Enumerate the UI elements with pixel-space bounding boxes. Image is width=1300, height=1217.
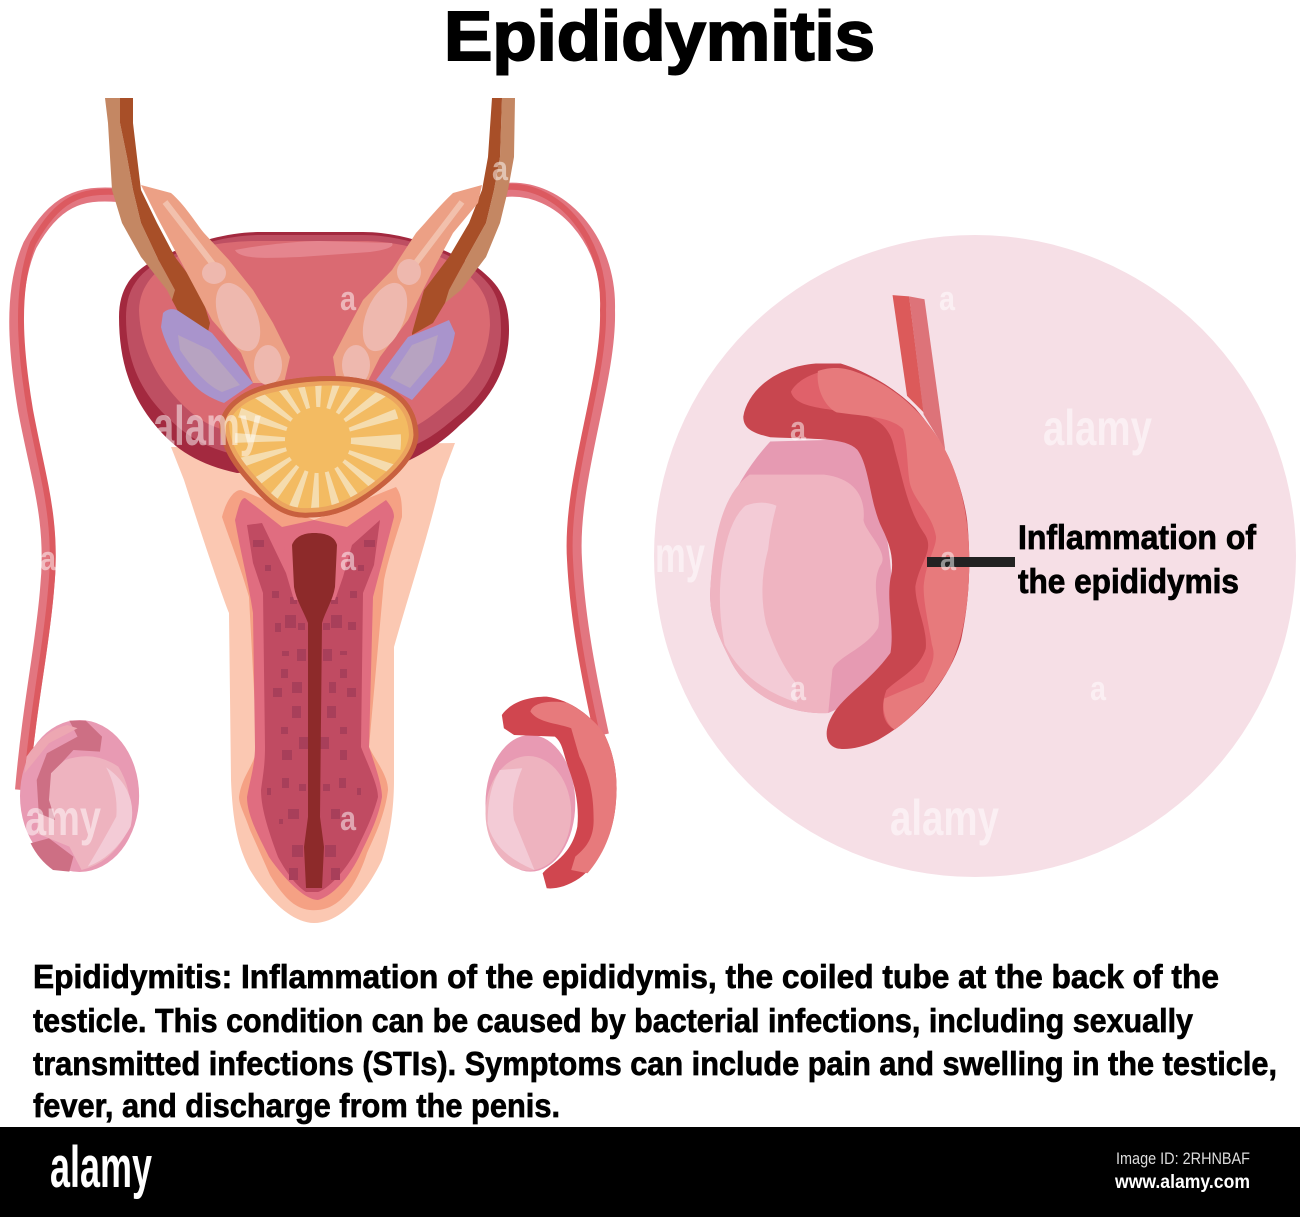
panel: male reproductive system diagram (16, 98, 617, 923)
text block: description (33, 958, 1277, 1124)
bladder outer wall (119, 232, 509, 473)
urethra arch (283, 527, 347, 600)
bladder middle wall (126, 235, 501, 455)
watermarks: alamy (1043, 400, 1152, 456)
watermarks: a (340, 540, 357, 578)
circle background (654, 235, 1296, 877)
tissue dots (253, 540, 375, 880)
urethra (292, 533, 337, 888)
text block: description: fever, and discharge from the penis. (33, 1087, 560, 1124)
watermarks: my (655, 527, 705, 583)
watermarks: a (790, 410, 807, 448)
right epididymis (502, 697, 617, 888)
watermarks (25, 150, 1152, 846)
penis outer layer (171, 443, 455, 923)
website: www.alamy.com (1114, 1172, 1250, 1193)
testis body (710, 439, 893, 713)
panel: magnified epididymis circle (654, 235, 1296, 877)
watermarks: a (1090, 670, 1107, 708)
erectile tissue (247, 520, 380, 892)
watermarks: a (40, 540, 57, 578)
footer bar (0, 1127, 1300, 1217)
penis orange layer (222, 487, 402, 910)
callout label: the epididymis (1018, 563, 1239, 601)
right testis (486, 697, 617, 888)
watermarks: alamy (890, 790, 999, 846)
bladder inner (139, 241, 490, 433)
right spermatic cord (505, 187, 608, 735)
text block: description: Epididymitis: Inflammation of the epididymis, the coiled tube at the back of the (33, 958, 1219, 995)
left ampulla (141, 185, 290, 385)
watermarks: a (340, 800, 357, 838)
left spermatic cord (16, 192, 118, 790)
left seminal vesicle (161, 309, 253, 403)
watermarks: amy (25, 790, 101, 846)
watermarks: a (492, 150, 509, 188)
watermarks: a (340, 280, 357, 318)
right seminal vesicle (376, 320, 455, 400)
image id: Image ID: 2RHNBAF (1116, 1149, 1250, 1168)
watermarks: a (939, 280, 956, 318)
footer logo: alamy (50, 1135, 152, 1200)
prostate (222, 379, 416, 515)
penis pink layer (235, 498, 394, 900)
text block: description: testicle. This condition can be caused by bacterial infections, including sexually (33, 1002, 1194, 1039)
bladder highlight (235, 241, 393, 258)
vas cord (893, 295, 945, 450)
watermarks: a (940, 540, 957, 578)
inflamed epididymis (743, 364, 969, 749)
callout label (1018, 519, 1257, 601)
right vas deferens (412, 98, 515, 335)
watermarks: a (790, 670, 807, 708)
testicle and epididymis (710, 295, 969, 749)
left vas deferens (105, 98, 210, 332)
left testis (20, 720, 139, 872)
right ampulla (333, 185, 482, 385)
watermarks: alamy (153, 394, 261, 457)
callout label: Inflammation of (1018, 519, 1257, 557)
callout line (927, 557, 1015, 567)
